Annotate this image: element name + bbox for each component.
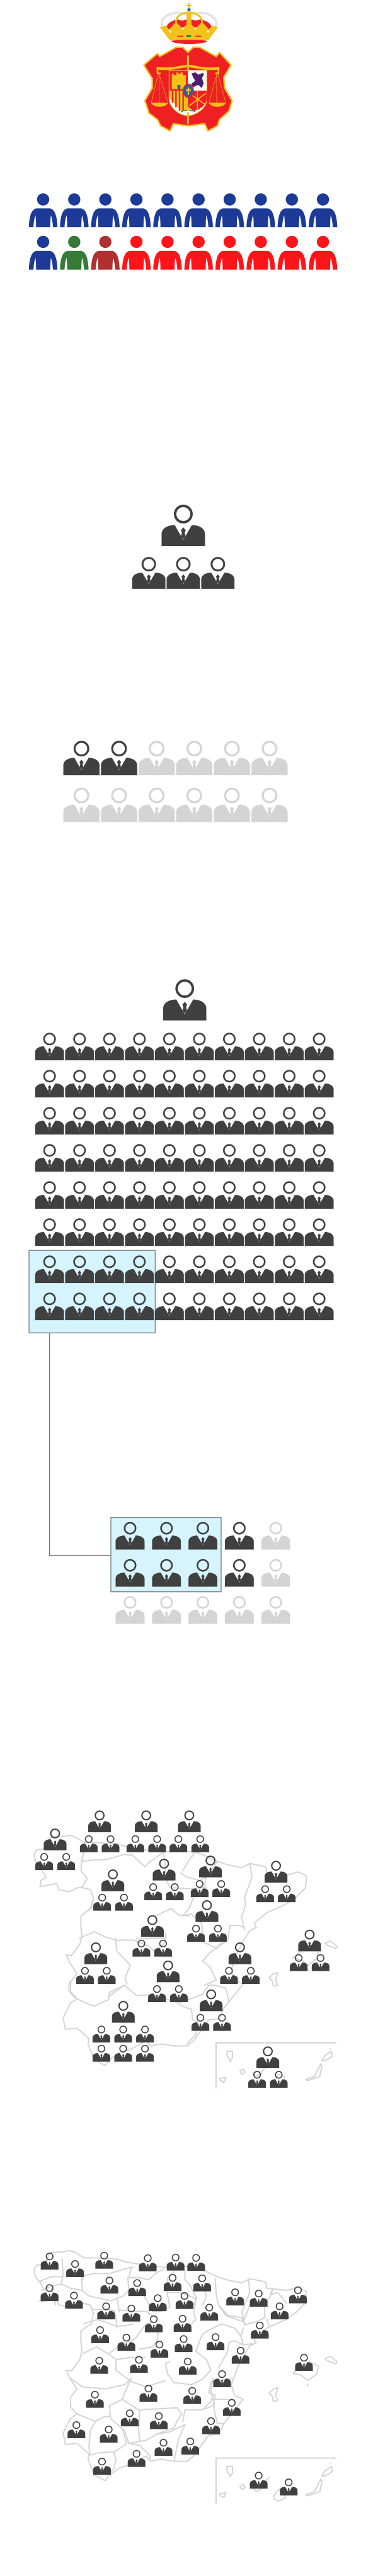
dark figures — [116, 1523, 254, 1587]
coat of arms — [144, 3, 232, 131]
highlight box: first selection — [29, 1250, 155, 1333]
highlight box: second selection — [111, 1518, 221, 1592]
group: Asturias — [80, 1811, 120, 1852]
group: Andalucia — [93, 2002, 154, 2062]
map outline and regional borders — [34, 1835, 337, 2088]
red figures — [122, 236, 337, 270]
group: Pais Vasco — [169, 1811, 209, 1852]
group: Comunidad Valenciana — [220, 1943, 260, 1984]
pictogram: president and eighty members — [35, 980, 334, 1320]
group: Castilla-La Mancha — [148, 1961, 188, 2002]
group: Galicia — [35, 1829, 75, 1870]
blue figures — [29, 193, 337, 270]
group: Cantabria — [127, 1811, 166, 1852]
scales — [151, 66, 226, 107]
sword — [185, 55, 191, 124]
green figure — [60, 236, 89, 270]
group: Extremadura — [76, 1943, 116, 1984]
connector line — [50, 1333, 111, 1555]
group: Navarra — [191, 1856, 230, 1897]
group: La Rioja — [144, 1859, 184, 1900]
dark figures — [64, 742, 137, 775]
map outline and province borders — [34, 2251, 337, 2503]
group: Castilla y Leon — [93, 1870, 133, 1911]
group: Canarias — [248, 2047, 288, 2088]
group: Murcia — [192, 1990, 231, 2031]
grey figures — [116, 1523, 290, 1624]
group: Baleares — [290, 1930, 329, 1971]
group: Aragon — [187, 1901, 227, 1942]
shield — [144, 47, 232, 131]
group: Madrid — [132, 1916, 172, 1957]
province figures — [41, 2253, 313, 2495]
quartered arms — [169, 70, 207, 116]
pictogram: one president and three members — [132, 506, 234, 589]
pictogram: fifteen seats detail — [116, 1523, 290, 1624]
grey figures — [64, 742, 288, 822]
brown figure — [91, 236, 120, 270]
group: Cataluna — [256, 1861, 295, 1902]
map: provinces — [34, 2251, 337, 2503]
map: autonomous communities — [34, 1811, 337, 2088]
pictogram: party seats — [29, 193, 337, 270]
crown — [160, 3, 218, 44]
pictogram: two of twelve — [64, 742, 288, 822]
